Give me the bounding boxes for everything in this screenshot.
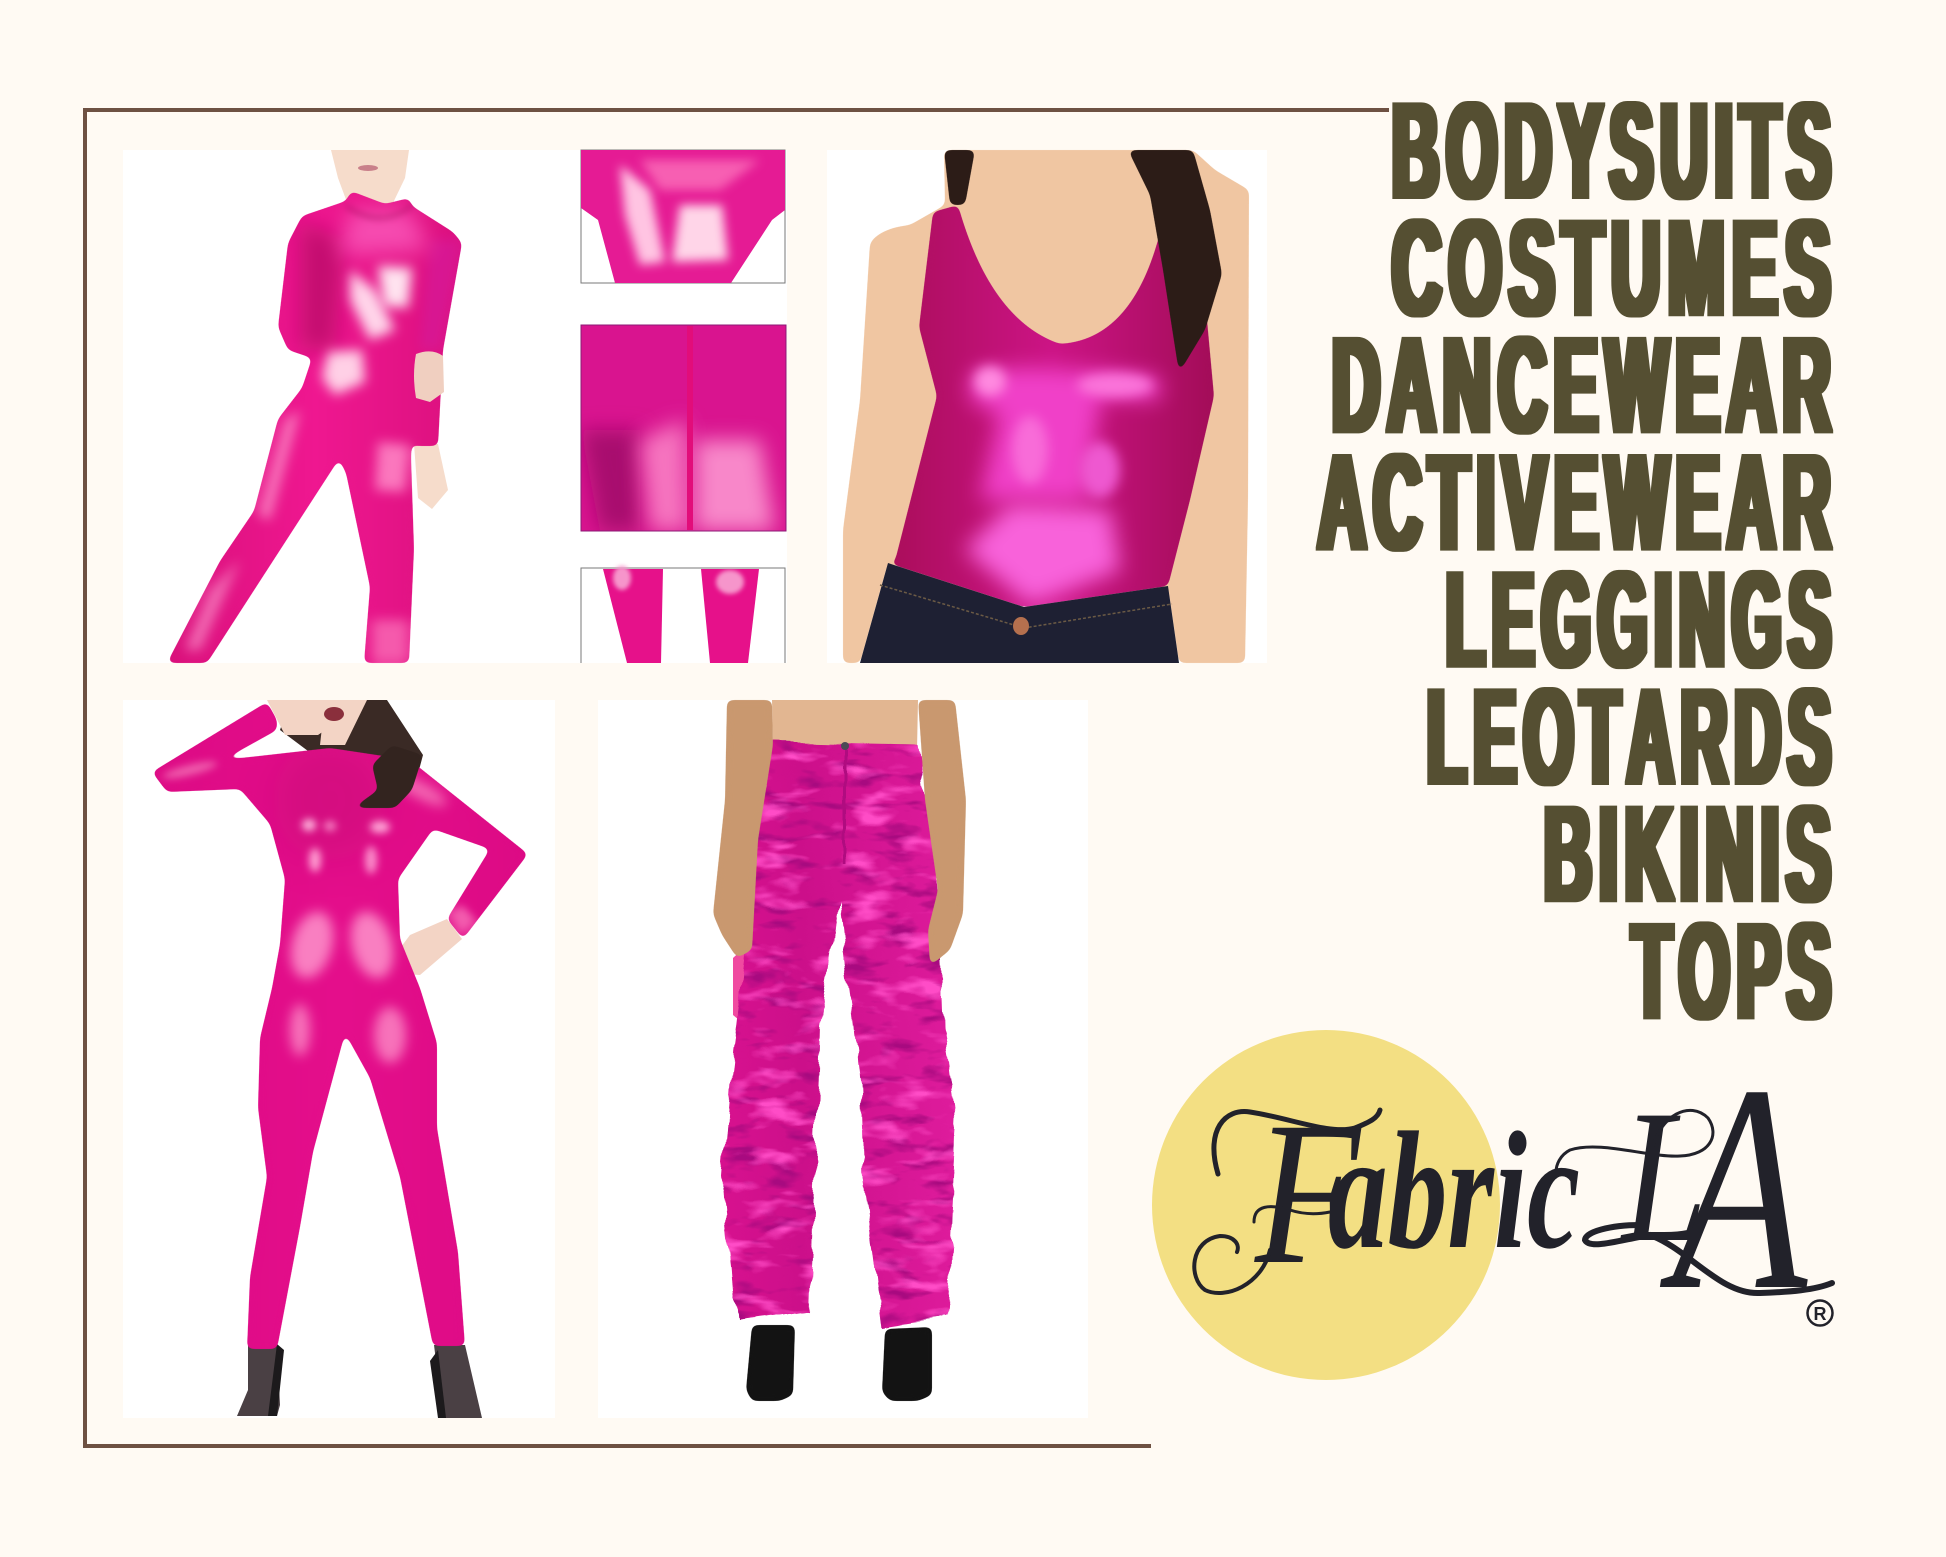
left boot [746, 1325, 795, 1401]
logo letter A: A [1658, 1024, 1810, 1351]
panel: photo of glossy pink catsuit [123, 695, 555, 1418]
model two skin [843, 150, 1249, 663]
model three catsuit [140, 695, 540, 1355]
pants button [841, 742, 849, 750]
detail crop: zipper back [581, 325, 786, 531]
detail crop: chest [581, 150, 785, 283]
model one upper hand [414, 351, 444, 402]
detail crop: legs [581, 566, 785, 663]
logo: registered mark: R [1814, 1304, 1826, 1324]
panel: photo of shiny pink bodysuit with detail crops [123, 150, 787, 670]
model two jeans [860, 563, 1179, 663]
product category list [1318, 74, 1838, 1047]
logo: yellow circle [1152, 1030, 1500, 1380]
panel: photo of crinkled metallic pink cargo pants [598, 700, 1088, 1418]
model four arms [713, 700, 966, 966]
model four side pocket [733, 945, 747, 1025]
model one face [331, 150, 409, 205]
model three lips [324, 707, 344, 721]
model one lips [358, 165, 378, 171]
panel: photo of metallic pink tank bodysuit [827, 150, 1267, 663]
model three hair [280, 700, 423, 804]
logo letter F: F [1253, 1080, 1361, 1307]
model one lower hand [414, 444, 448, 509]
model three face and hand [267, 700, 462, 975]
decorative frame lines [83, 108, 1389, 1448]
logo letters abric: abric [1328, 1098, 1580, 1284]
logo letter L: L [1620, 1072, 1707, 1282]
infographic canvas [83, 101, 1835, 1448]
logo: registered mark [1808, 1300, 1832, 1326]
model three hair curl over shoulder [353, 745, 423, 808]
model two hair [944, 150, 1222, 373]
logo flourishes [1194, 1110, 1832, 1293]
model two bodysuit [894, 206, 1214, 607]
model four belly [772, 700, 918, 750]
logo: FabricLA wordmark [1194, 1024, 1832, 1351]
model one bodysuit [170, 192, 462, 664]
model four pants [720, 740, 956, 1329]
model three shoes and stockings [237, 1344, 482, 1418]
right boot [882, 1327, 932, 1401]
